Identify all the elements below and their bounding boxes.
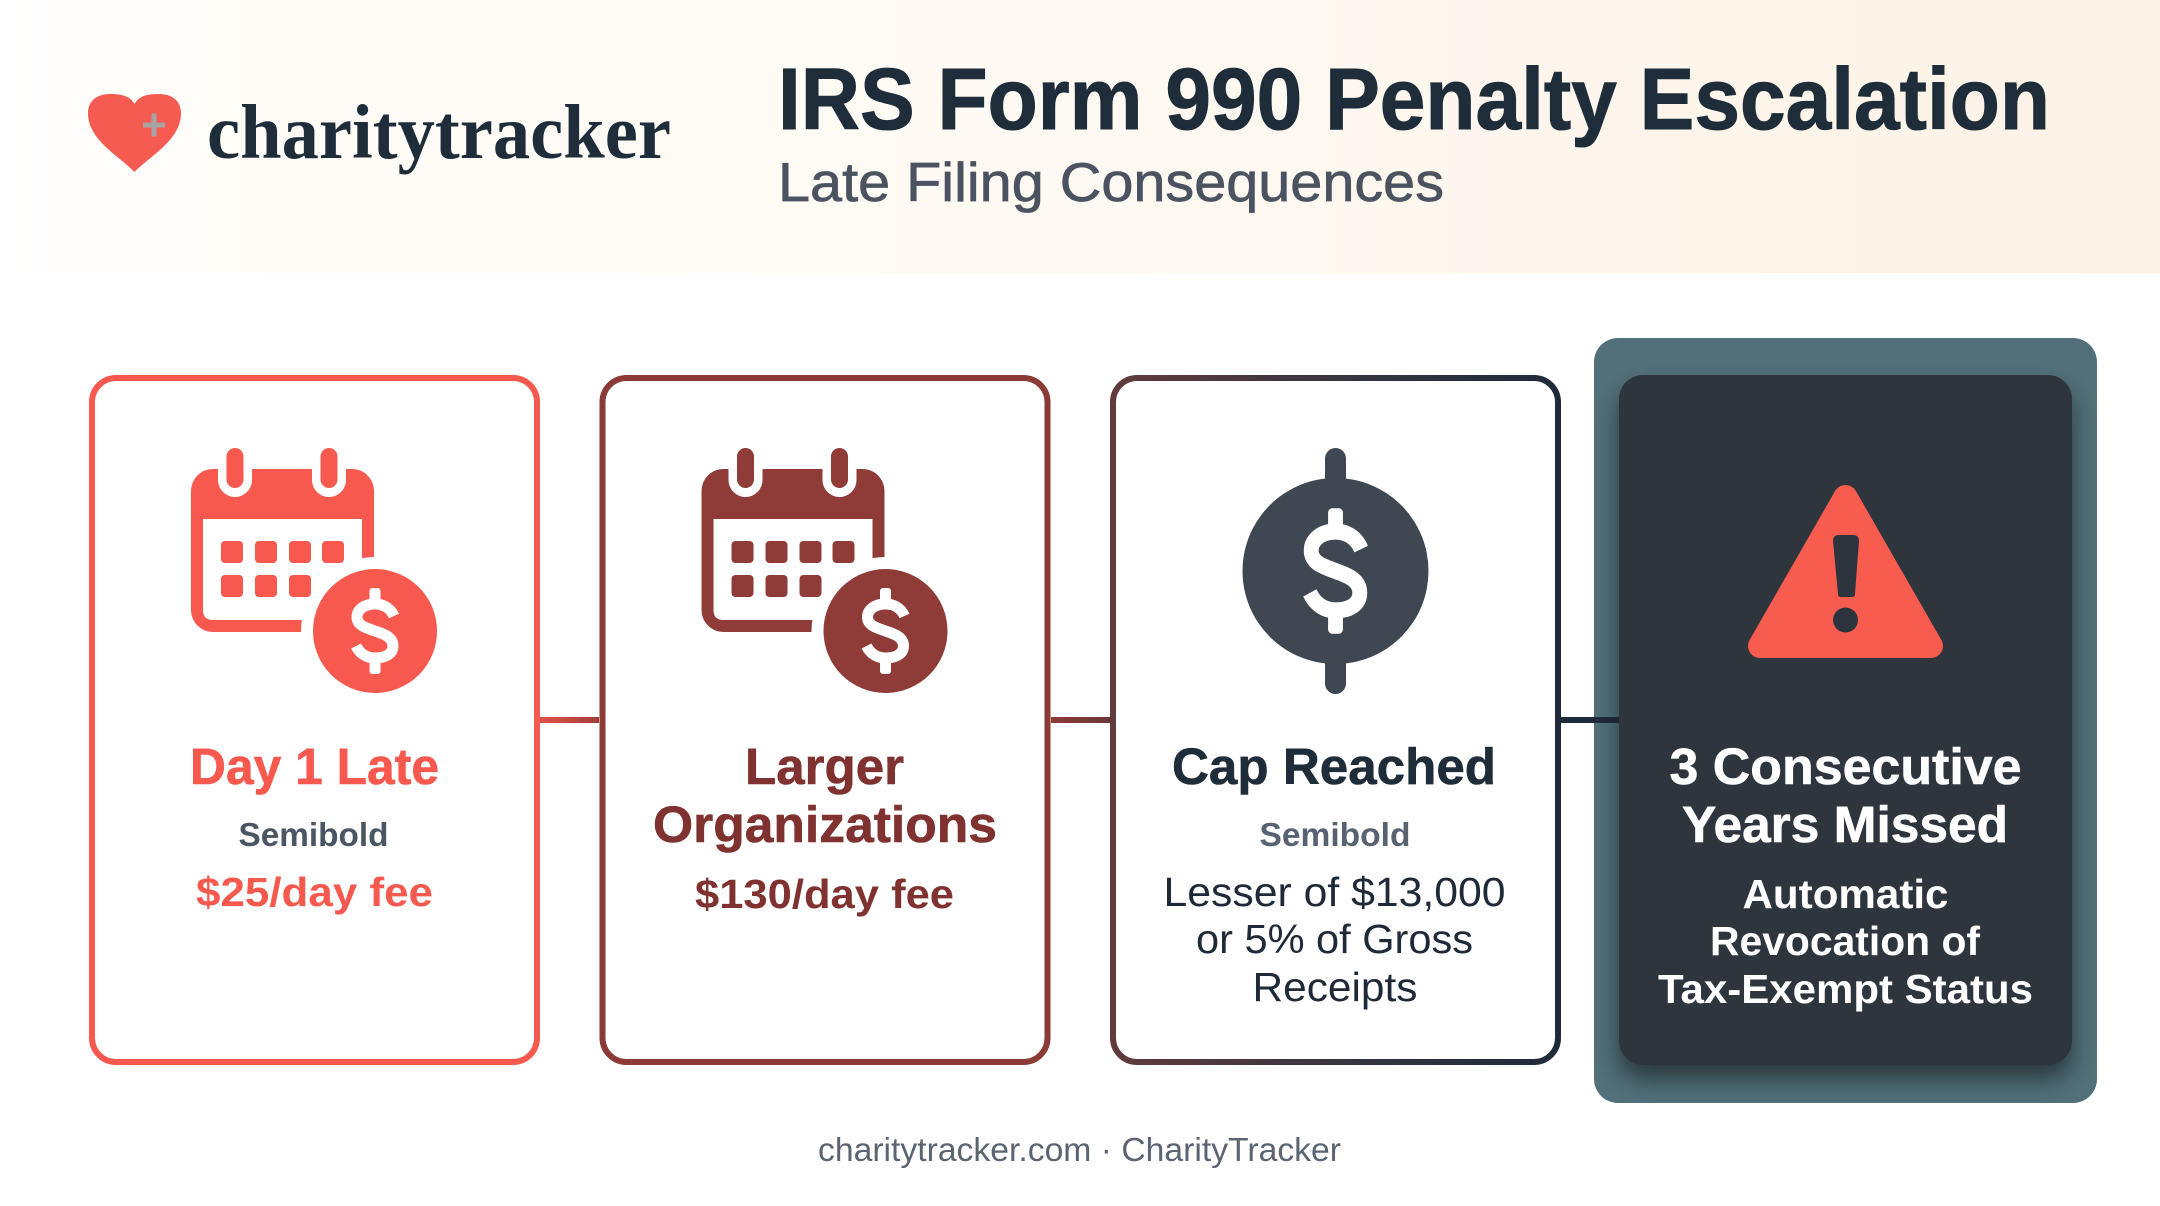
step heading: Organizations	[653, 796, 997, 853]
subtitle: Late Filing Consequences	[778, 151, 1444, 213]
step heading	[1670, 738, 2022, 853]
panel: day 1 late	[92, 378, 537, 1062]
penalty detail: Revocation of	[1710, 918, 1980, 964]
header band	[0, 0, 2160, 273]
icon: dollar coin	[1242, 448, 1428, 694]
penalty detail	[1164, 869, 1506, 1010]
panel: larger organizations	[602, 378, 1048, 1062]
panel: cap reached	[1113, 378, 1558, 1062]
panel: 3 consecutive years missed	[1561, 338, 2097, 1103]
penalty detail: or 5% of Gross	[1196, 916, 1473, 962]
step heading: Day 1 Late	[190, 738, 439, 795]
step heading: Larger	[745, 738, 904, 795]
icon: calendar with dollar coin	[702, 440, 960, 705]
connector 1 to 2	[540, 717, 599, 723]
step heading	[653, 738, 997, 853]
icon: heart	[88, 94, 181, 172]
icon: warning triangle	[1760, 497, 1931, 646]
title: IRS Form 990 Penalty Escalation	[778, 51, 2050, 148]
penalty detail: Tax-Exempt Status	[1658, 966, 2033, 1012]
step heading: Years Missed	[1682, 796, 2008, 853]
icon: calendar with dollar coin	[191, 440, 449, 705]
connector 3 to 4	[1561, 717, 1619, 723]
penalty detail: Receipts	[1252, 964, 1418, 1010]
penalty detail: Lesser of $13,000	[1164, 869, 1506, 915]
step heading: 3 Consecutive	[1670, 738, 2022, 795]
step heading: Cap Reached	[1172, 738, 1496, 795]
penalty detail: Automatic	[1742, 871, 1948, 917]
fee: $25/day fee	[196, 869, 433, 915]
logo	[88, 89, 671, 175]
penalty detail	[1658, 871, 2033, 1012]
weight label: Semibold	[1260, 816, 1410, 853]
footer: charitytracker.com · CharityTracker	[818, 1131, 1341, 1168]
weight label: Semibold	[238, 816, 388, 853]
connector 2 to 3	[1051, 717, 1110, 723]
fee: $130/day fee	[695, 871, 954, 917]
logo wordmark: charitytracker	[207, 89, 671, 175]
